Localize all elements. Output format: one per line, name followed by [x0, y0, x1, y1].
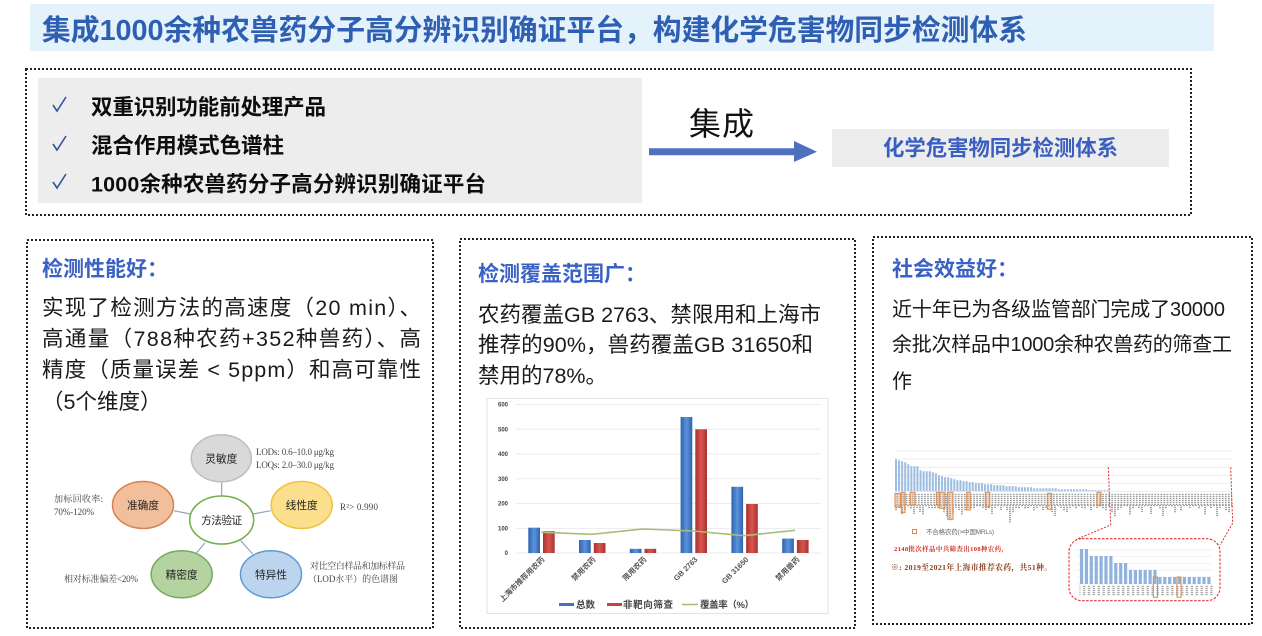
panel: detection coverage	[460, 239, 855, 628]
node: precision	[151, 551, 212, 598]
x axis labels	[497, 554, 802, 604]
heading: 检测覆盖范围广：	[478, 262, 646, 286]
body text: 作	[892, 370, 912, 393]
bars: detection counts	[896, 459, 1108, 491]
title: 集成1000余种农兽药分子高分辨识别确证平台，构建化学危害物同步检测体系	[42, 14, 1027, 47]
body text: 近十年已为各级监管部门完成了30000	[892, 298, 1225, 321]
highlighted non-compliant labels	[895, 492, 1101, 519]
x axis labels: 禁用兽药	[773, 554, 802, 583]
x axis labels: GB 31650	[720, 555, 750, 586]
x axis labels: 上海市推荐用农药	[497, 554, 547, 604]
body text: 禁用的78%。	[478, 364, 607, 388]
panel: social benefit	[873, 237, 1252, 624]
y axis labels: 400	[498, 452, 509, 458]
y axis labels: 100	[498, 526, 509, 532]
x axis labels: 限用农药	[620, 554, 649, 583]
body text: 农药覆盖GB 2763、禁限用和上海市	[478, 303, 821, 327]
y axis labels: 500	[498, 427, 509, 433]
note: RSD: 相对标准偏差<20%	[64, 573, 138, 584]
body text: 余批次样品中1000余种农兽药的筛查工	[892, 333, 1232, 356]
node: specificity	[240, 551, 302, 598]
y axis labels: 300	[498, 477, 509, 483]
result box: 化学危害物同步检测体系	[883, 136, 1118, 160]
bar chart: pesticide coverage	[487, 398, 828, 614]
note: chromatogram: 对比空白样品和加标样品	[310, 560, 405, 571]
chart legend	[559, 599, 754, 611]
node: linearity: 线性度	[286, 499, 318, 512]
body text	[42, 296, 421, 414]
chart legend: 非靶向筛查	[623, 599, 673, 611]
item 1: 双重识别功能前处理产品	[91, 96, 326, 120]
node: method validation	[190, 496, 254, 544]
body text: （5个维度）	[42, 390, 161, 414]
arrow	[649, 141, 817, 162]
item 3: 1000余种农兽药分子高分辨识别确证平台	[91, 172, 486, 196]
result box	[832, 129, 1169, 167]
note: chromatogram: （LOD水平）的色谱图	[308, 573, 398, 584]
icon: check 1	[53, 97, 66, 111]
bars: non-target screening	[543, 429, 809, 553]
line: coverage rate	[541, 529, 795, 536]
y axis labels: 200	[498, 502, 509, 508]
node: sensitivity	[191, 435, 251, 482]
x axis labels: GB 2763	[672, 555, 699, 583]
body text: 推荐的90%，兽药覆盖GB 31650和	[478, 333, 813, 357]
bars: total	[528, 417, 794, 553]
note: LOD and LOQ: LODs: 0.6–10.0 μg/kg	[256, 447, 334, 457]
body text	[892, 298, 1232, 393]
y axis labels	[498, 402, 509, 557]
bar chart: screened pesticides	[891, 451, 1233, 601]
note: recovery	[54, 493, 103, 517]
icon: check 2	[53, 136, 66, 150]
chart legend: 总数	[576, 599, 595, 611]
note: recovery: 70%-120%	[54, 507, 94, 517]
body text: 精度（质量误差 < 5ppm）和高可靠性	[42, 358, 421, 382]
node: precision: 精密度	[166, 568, 198, 581]
body text: 高通量（788种农药+352种兽药）、高	[42, 327, 421, 351]
y axis labels: 600	[498, 402, 509, 408]
note: red summary: 2148批次样品中共筛查出108种农药，	[894, 544, 1008, 554]
red zoom connector	[1078, 467, 1233, 545]
chart legend: 覆盖率（%）	[700, 599, 754, 611]
inset bars	[1082, 549, 1209, 584]
item 2: 混合作用模式色谱柱	[91, 134, 284, 158]
body text	[478, 303, 821, 388]
inset labels	[1080, 585, 1212, 596]
node: accuracy	[112, 482, 174, 528]
note: LOD and LOQ	[256, 447, 334, 470]
heading: 检测性能好：	[42, 257, 168, 281]
note: linearity: R²> 0.990	[340, 502, 378, 512]
x axis labels: 禁用农药	[569, 554, 598, 583]
panel: detection performance	[27, 240, 433, 628]
panel: integration summary	[26, 69, 1191, 215]
node: method validation: 方法验证	[201, 514, 242, 527]
note: brown footnote: ※: 2019至2021年上海市推荐农药，共51种。	[891, 562, 1052, 573]
inset chart	[1069, 539, 1220, 601]
legend: non-compliant: 不合格农药(>中国MRLs)	[926, 527, 994, 536]
note: chromatogram	[308, 560, 405, 584]
method validation diagram	[54, 435, 405, 598]
y axis labels: 0	[505, 551, 509, 557]
legend: non-compliant	[912, 527, 994, 536]
note: recovery: 加标回收率:	[54, 493, 103, 504]
node: sensitivity: 灵敏度	[205, 452, 238, 465]
node: accuracy: 准确度	[127, 499, 159, 512]
note: LOD and LOQ: LOQs: 2.0–30.0 μg/kg	[256, 460, 334, 470]
icon: check 3	[53, 174, 66, 188]
heading: 社会效益好：	[892, 258, 1018, 281]
body text: 实现了检测方法的高速度（20 min）、	[42, 296, 421, 320]
pesticide name labels	[895, 493, 1232, 523]
arrow label: 集成	[689, 106, 754, 142]
inset highlights	[1153, 577, 1181, 597]
node: specificity: 特异性	[255, 568, 287, 581]
checklist	[38, 78, 642, 203]
node: linearity	[271, 482, 332, 528]
title	[30, 4, 1214, 51]
